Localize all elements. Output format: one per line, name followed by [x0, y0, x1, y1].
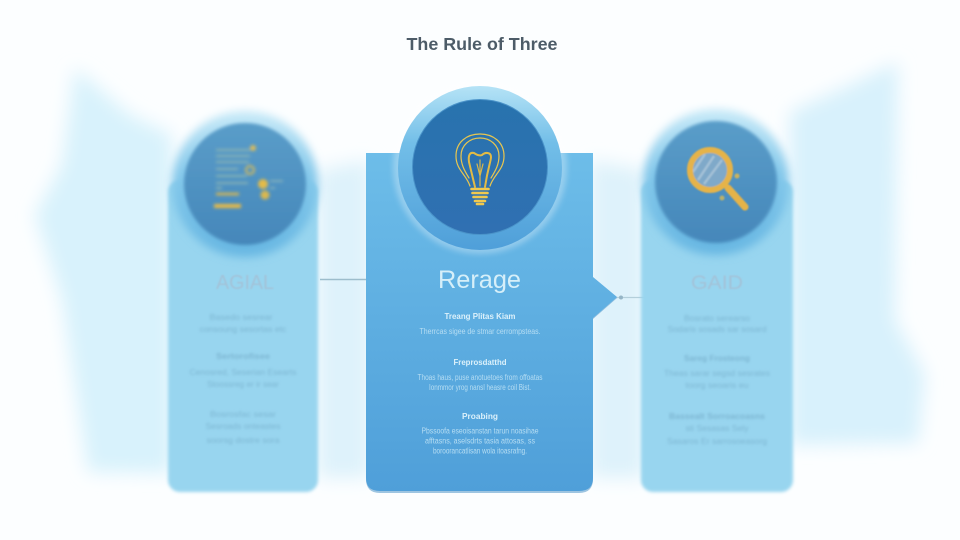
panel: right card	[641, 109, 793, 492]
right card text	[664, 313, 770, 446]
right card text: Theas sarar segsd sesrates	[664, 368, 770, 378]
feature three	[422, 412, 539, 456]
left card text: Bosrosfac sesar	[210, 409, 276, 419]
icon: document lines with gears	[214, 145, 283, 206]
icon badge: light bulb	[393, 80, 567, 254]
feature one: Therrcas sigee de stmar cerrompsteas.	[420, 327, 540, 336]
feature one: Treang Plitas Kiam	[444, 312, 516, 321]
right card text: toorg seoaris eu	[686, 380, 749, 390]
panel: left card	[168, 111, 318, 492]
icon badge: document	[172, 111, 318, 257]
left card text: Sesroads onteastes	[206, 421, 280, 431]
centre card heading: Rerage	[438, 266, 521, 294]
right card text: sti Sesasas Sely	[686, 423, 749, 433]
right card heading: GAID	[691, 273, 743, 294]
title: The Rule of Three	[406, 34, 558, 54]
left card text: Stoossreg er ir sear	[207, 379, 279, 389]
feature two	[418, 358, 542, 392]
connector: centre card to right card	[614, 296, 646, 300]
right card text: Sasaros Er sarrosoeasorg	[667, 436, 767, 446]
right card text: Bassealt Sorroacoasns	[669, 411, 765, 421]
left card text: Cenosred, Seserian Esearts	[190, 367, 296, 377]
left card text: consoung sesortas etc	[200, 324, 287, 334]
panel: centre card	[366, 80, 617, 493]
feature two: Thoas haus, puse anotuetoes from offoatas	[418, 373, 542, 382]
left card text: soorsg dostre sora	[206, 435, 280, 445]
feature two: Freprosdatthd	[454, 358, 507, 367]
feature three: Proabing	[462, 412, 498, 421]
icon: magnifying glass	[690, 150, 745, 207]
left card text: Sertorofisee	[216, 351, 270, 361]
right card text: Bosrato serearso	[684, 313, 750, 323]
icon badge: magnifier	[643, 109, 789, 255]
feature one	[420, 312, 540, 336]
connector: left card to centre card	[320, 278, 366, 280]
right card text: Sodaris sosads sar sosard	[668, 324, 767, 334]
left card text	[190, 312, 296, 445]
feature three: boroorancatlisan wola itoasrafng.	[433, 446, 527, 456]
left card heading: AGIAL	[216, 272, 274, 294]
icon: light bulb	[456, 134, 504, 204]
feature two: Ionmmor yrog nansl heasre coil Bist.	[429, 383, 531, 392]
feature three: afftasns, aselsdrts tasia attosas, ss	[425, 436, 535, 446]
right card text: Sareg Frosteong	[684, 353, 750, 363]
left card text: Basedo sesrear	[210, 312, 273, 322]
feature three: Pbssoofa eseoisanstan tarun noasihae	[422, 426, 539, 436]
